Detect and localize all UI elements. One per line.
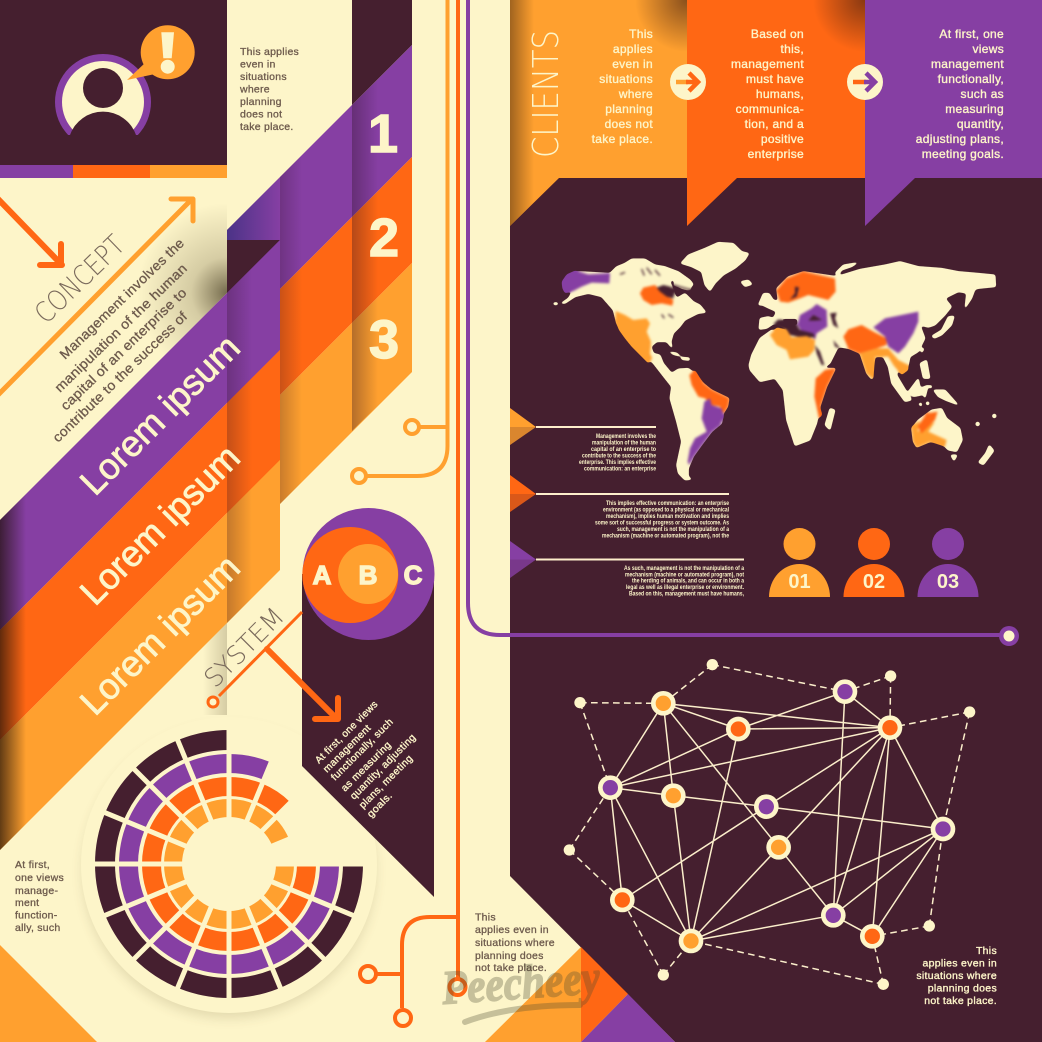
bottom-left corner triangle	[0, 945, 97, 1042]
region: canada	[640, 285, 673, 306]
text block: callout 1: communication: an enterprise	[584, 466, 657, 472]
panel: clients column 1	[510, 0, 687, 226]
text block: column 1: This	[629, 27, 653, 41]
text block: callout 2	[595, 501, 730, 540]
text block: chart note: At first,	[15, 859, 50, 871]
text block: column 3	[916, 27, 1004, 161]
label C: C	[404, 560, 423, 590]
connector: orange lines	[360, 0, 466, 1026]
number 3: 3	[369, 310, 399, 370]
connector: system line	[208, 612, 302, 707]
text block: column 3: functionally,	[938, 72, 1004, 86]
panel: radial segmented chart	[81, 717, 377, 1018]
number 2: 2	[369, 208, 399, 268]
text block: planning note: situations	[240, 71, 287, 83]
text block: callout 3	[624, 566, 745, 598]
icon: person 03: 03	[937, 571, 959, 593]
icon: alert speech bubble	[127, 25, 195, 80]
icon: person 01	[769, 528, 830, 597]
text block: column 2: Based on	[751, 27, 804, 41]
text block: planning note: planning	[240, 96, 282, 108]
text block: center note	[475, 912, 555, 974]
text block: planning note: does not	[240, 109, 282, 121]
text block: column 1: take place.	[592, 132, 653, 146]
text block: chart note: manage-	[15, 885, 58, 897]
text block: column 1: applies	[613, 42, 653, 56]
text block: concept description: contribute to the success of	[50, 309, 190, 445]
region: sahara	[770, 327, 815, 359]
text block: callout 2: some sort of successful progress or system outcome. As	[595, 521, 730, 527]
panel: clients column 3	[865, 0, 1042, 226]
text block: column 2: humans,	[756, 87, 804, 101]
text block: network note: not take place.	[924, 995, 997, 1007]
band label 2: Lorem ipsum	[72, 437, 248, 613]
text block: concept description: manipulation of the human	[52, 261, 190, 395]
mediterranean sea	[773, 319, 815, 337]
text block: system description: quantity, adjusting	[348, 732, 418, 802]
text block: column 3: such as	[961, 87, 1004, 101]
region: northern europe	[777, 272, 836, 303]
text block: system description: At first, one views	[313, 699, 381, 766]
text block: callout 1: Management involves the	[596, 434, 657, 440]
heading: clients: CLIENTS	[526, 30, 567, 158]
text block: column 2: communica-	[736, 102, 804, 116]
text block: center note: situations where	[475, 937, 555, 949]
text block: column 1: even in	[612, 57, 653, 71]
text block: center note: not take place.	[475, 962, 547, 974]
caribbean islands	[667, 351, 690, 361]
panel: ABC system pin	[302, 508, 434, 897]
world map: afro-eurasia and oceania	[749, 262, 996, 465]
panel: dark clients background	[510, 178, 1042, 1042]
text block: chart note	[15, 859, 64, 934]
text block: callout 3: Based on this, management must have humans,	[629, 592, 744, 598]
text block: system description: goals.	[365, 790, 395, 820]
region: northern brazil	[689, 370, 729, 413]
text block: callout 2: This implies effective communication: an enterprise	[606, 501, 730, 507]
text block: column 1: does not	[605, 117, 653, 131]
text block: network note: applies even in	[922, 958, 997, 970]
text block: column 2	[731, 27, 804, 161]
text block: callout 2: environment (as opposed to a physical or mechanical	[603, 508, 729, 514]
connector: yellow lines	[352, 0, 448, 483]
text block: system description	[313, 699, 418, 820]
solid links	[610, 692, 943, 941]
text block: network note: situations where	[916, 970, 997, 982]
region: india and southeast asia	[860, 348, 908, 379]
text block: chart note: ment	[15, 897, 39, 909]
landmass: greenland	[681, 242, 749, 291]
label B: B	[359, 560, 377, 590]
region: turkey and ukraine	[798, 304, 827, 340]
text block: system description: plans, meeting	[357, 753, 415, 811]
region: east africa	[814, 368, 836, 418]
heading: concept: CONCEPT	[28, 228, 131, 330]
icon: person 01: 01	[788, 571, 811, 593]
text block: planning note: where	[239, 84, 270, 96]
text block: column 2: this,	[780, 42, 804, 56]
text block: callout 2: mechanism), implies human motivation and implies	[606, 514, 730, 520]
text block: planning note: take place.	[240, 121, 294, 133]
text block: system description: management	[321, 723, 374, 775]
label A: A	[313, 560, 332, 590]
text block: column 1: where	[618, 87, 653, 101]
icon: person 02: 02	[863, 571, 885, 593]
text block: callout 3: the herding of animals, and can occur in both a	[632, 579, 745, 585]
text block: column 2: enterprise	[748, 147, 804, 161]
text block: column 3: management	[931, 57, 1004, 71]
text block: chart note: ally, such	[15, 922, 60, 934]
landmass: africa	[749, 330, 836, 446]
text block: column 3: adjusting plans,	[916, 132, 1004, 146]
text block: callout 2: mechanism (machine or automated program), not the	[602, 534, 730, 540]
icon: person 02	[844, 528, 904, 597]
region: south america south	[688, 398, 724, 465]
text block: callout 3: mechanism (machine or automated program), not	[625, 572, 744, 578]
text block: column 1	[592, 27, 653, 146]
arrow: yellow diagonal	[0, 199, 193, 396]
text block: callout 1	[579, 434, 657, 472]
text block: callout 1: capital of an enterprise to	[591, 447, 656, 453]
text block: planning note: even in	[240, 59, 276, 71]
hudson bay	[657, 285, 675, 298]
world map: americas	[553, 242, 752, 480]
fold shadow below yellow band	[203, 623, 227, 715]
connector: purple line	[468, 0, 1019, 646]
region: alaska	[562, 271, 610, 293]
text block: callout 1: enterprise. This implies effective	[579, 460, 657, 466]
baltic sea	[790, 287, 799, 299]
text block: callout 3: As such, management is not the manipulation of a	[624, 566, 745, 572]
arctic channels	[620, 268, 692, 318]
callout 1	[510, 408, 657, 472]
text block: column 2: must have	[746, 72, 804, 86]
panel: clients column 2	[687, 0, 865, 226]
text block: center note: applies even in	[475, 924, 549, 936]
network graph	[564, 659, 975, 990]
landmass: eurasia	[758, 262, 996, 402]
landmass: iceland	[741, 280, 752, 287]
small nodes	[564, 659, 975, 990]
text block: planning note: This applies	[240, 46, 299, 58]
number 1: 1	[368, 104, 398, 164]
bottom triangles	[485, 947, 675, 1042]
node centers	[603, 684, 951, 949]
text block: column 3: quantity,	[957, 117, 1004, 131]
text block: network note: planning does	[928, 983, 997, 995]
region: western usa and mexico	[616, 311, 652, 363]
panel: user alert header	[0, 0, 227, 178]
caspian sea	[830, 313, 838, 328]
text block: center note: planning does	[475, 950, 544, 962]
text block: chart note: one views	[15, 872, 64, 884]
text block: column 3: At first, one	[939, 27, 1004, 41]
callout 3	[510, 541, 745, 598]
panel: lorem ipsum bands	[0, 240, 280, 850]
icon: arrow circle 1	[670, 64, 706, 100]
text block: column 2: positive	[761, 132, 804, 146]
text block: concept description: Management involves the	[57, 235, 187, 362]
icon: person 03	[918, 528, 978, 597]
region: central asia	[843, 325, 887, 353]
red sea	[815, 345, 824, 365]
region: china	[873, 312, 918, 353]
callout 2	[510, 475, 730, 540]
icon: user avatar	[50, 54, 156, 153]
arrow: system arrow	[267, 649, 338, 719]
text block: column 1: situations	[599, 72, 653, 86]
text block: column 3: meeting goals.	[922, 147, 1004, 161]
text block: column 1: planning	[605, 102, 653, 116]
region: west australia	[912, 421, 947, 447]
heading: system: SYSTEM	[199, 602, 291, 694]
text block: system description: as measuring	[339, 740, 394, 794]
text block: network note	[916, 945, 997, 1007]
text block: planning note	[239, 46, 299, 133]
region: north australia	[918, 412, 938, 433]
band label 1: Lorem ipsum	[72, 327, 248, 503]
alaskan island	[553, 302, 559, 305]
text block: concept description: capital of an enterprise to	[58, 285, 190, 413]
fold shadow on concept panel	[137, 203, 227, 383]
persian gulf	[833, 340, 840, 348]
text block: callout 2: such, management is not the manipulation of a	[617, 527, 730, 533]
watermark: Peecheey	[439, 951, 602, 1015]
text block: column 3: views	[972, 42, 1004, 56]
dashed links	[569, 665, 970, 984]
text block: network note: This	[976, 945, 997, 957]
text block: center note: This	[475, 912, 496, 924]
text block: concept description	[50, 235, 190, 445]
landmass: islands	[825, 263, 996, 465]
text block: column 2: management	[731, 57, 804, 71]
text block: system description: functionally, such	[329, 717, 396, 783]
text block: column 3: measuring	[945, 102, 1004, 116]
text block: column 2: tion, and a	[745, 117, 804, 131]
text block: callout 1: manipulation of the human	[592, 440, 656, 446]
black sea	[808, 315, 822, 321]
panel: numbered ribbon	[227, 0, 412, 557]
text block: callout 1: contribute to the success of the	[582, 453, 657, 459]
text block: chart note: function-	[15, 910, 58, 922]
text block: callout 3: legal as well as illegal enterprise or environment.	[626, 585, 744, 591]
band label 3: Lorem ipsum	[72, 547, 248, 723]
arrow: orange diagonal	[0, 198, 62, 265]
landmass: north and south america	[561, 259, 729, 480]
large nodes	[598, 679, 955, 953]
icon: arrow circle 2	[847, 64, 883, 100]
